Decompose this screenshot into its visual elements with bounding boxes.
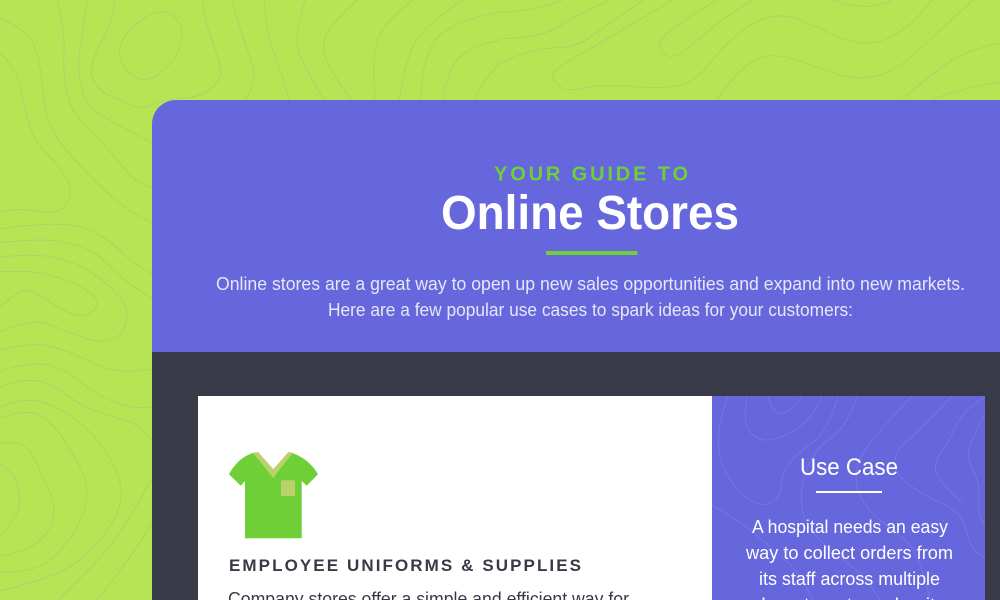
icon: green uniform shirt [229, 452, 318, 538]
use case text [745, 517, 953, 600]
title: Online Stores [441, 187, 739, 240]
panel: use case [712, 396, 987, 600]
use case heading: Use Case [800, 454, 898, 481]
panel: employee uniforms card [198, 396, 712, 600]
eyebrow heading: YOUR GUIDE TO [494, 164, 688, 186]
use case underline [816, 491, 882, 493]
intro text: Here are a few popular use cases to spark ideas for your customers: [328, 300, 853, 320]
use case text: way to collect orders from [745, 543, 953, 563]
use case text: A hospital needs an easy [752, 517, 948, 537]
card heading: EMPLOYEE UNIFORMS & SUPPLIES [229, 556, 581, 575]
panel: dark content area [152, 352, 1000, 600]
panel: purple header [152, 100, 1000, 352]
title underline [546, 251, 638, 255]
intro text [216, 274, 965, 320]
intro text: Online stores are a great way to open up new sales opportunities and expand into new markets. [216, 274, 965, 294]
use case text: its staff across multiple [759, 569, 940, 589]
